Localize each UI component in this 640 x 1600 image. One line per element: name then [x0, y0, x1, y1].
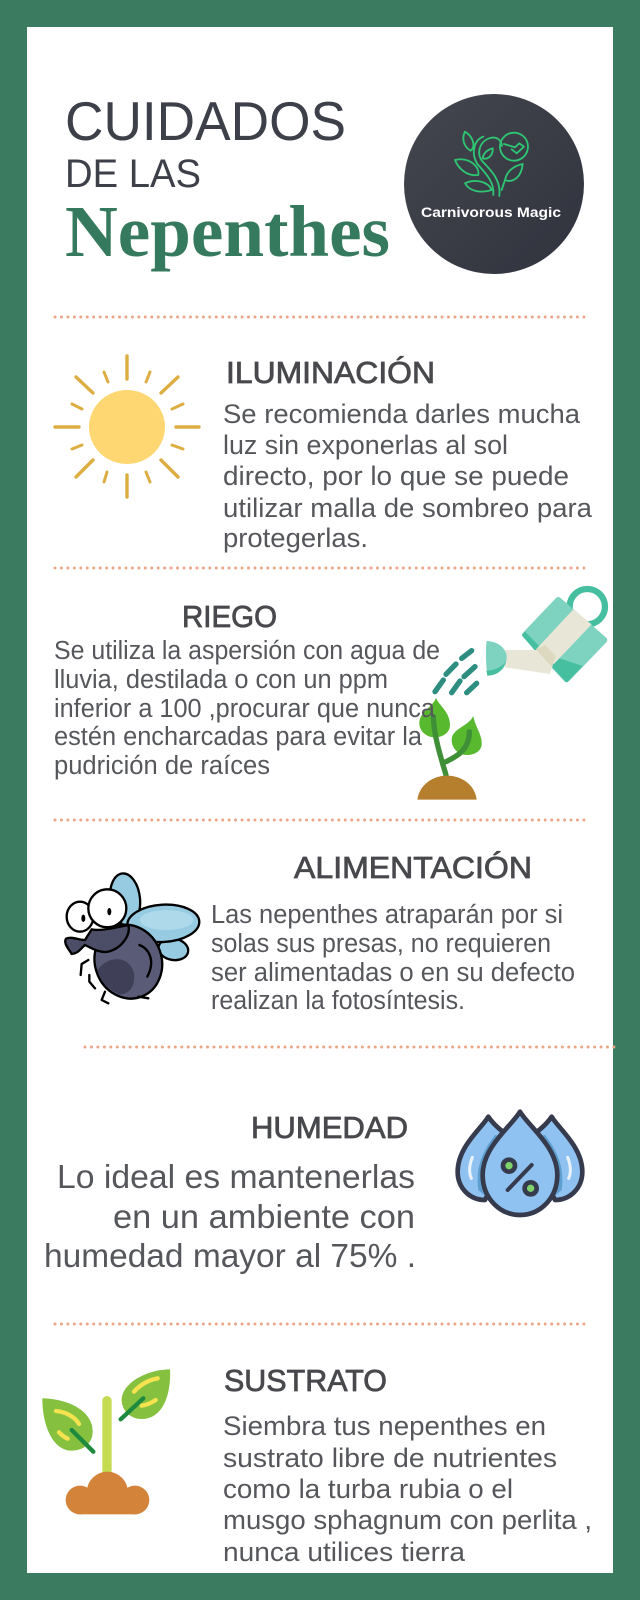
text: iluminación: luz sin exponerlas al sol — [223, 430, 508, 460]
text: alimentación: realizan la fotosíntesis. — [211, 987, 465, 1015]
title: DE LAS — [65, 152, 201, 196]
heading: sustrato: SUSTRATO — [224, 1363, 387, 1398]
heading: alimentación: ALIMENTACIÓN — [294, 850, 532, 885]
panel: alimentación — [65, 850, 575, 1015]
text: riego: pudrición de raíces — [54, 752, 270, 780]
text: alimentación: solas sus presas, no requieren — [211, 930, 551, 958]
text: humedad: humedad mayor al 75% . — [44, 1237, 416, 1274]
text: riego: Se utiliza la aspersión con agua de — [54, 637, 440, 665]
panel: riego — [54, 589, 605, 800]
text: sustrato — [223, 1411, 592, 1567]
panel: sustrato — [42, 1363, 592, 1567]
text: humedad — [44, 1158, 416, 1274]
text: sustrato: Siembra tus nepenthes en — [223, 1411, 546, 1441]
text: iluminación: protegerlas. — [223, 523, 368, 553]
title — [65, 90, 390, 272]
text: alimentación: Las nepenthes atraparán por si — [211, 901, 563, 929]
logo badge: Carnivorous Magic — [404, 94, 584, 274]
text: iluminación: utilizar malla de sombreo para — [223, 493, 592, 523]
text: riego: estén encharcadas para evitar la — [54, 723, 423, 751]
text: riego: inferior a 100 ,procurar que nunca — [54, 695, 436, 723]
text: humedad: Lo ideal es mantenerlas — [57, 1158, 415, 1195]
text: riego — [54, 637, 440, 780]
text: sustrato: como la turba rubia o el — [223, 1474, 513, 1504]
title: Nepenthes — [65, 191, 390, 272]
icon: watering can and plant — [417, 589, 605, 800]
logo badge: Carnivorous Magic: Carnivorous Magic — [421, 204, 561, 220]
text: iluminación — [223, 399, 592, 553]
text: riego: lluvia, destilada o con un ppm — [54, 666, 388, 694]
heading: iluminación: ILUMINACIÓN — [226, 355, 435, 390]
panel: humedad — [44, 1110, 582, 1274]
text: iluminación: directo, por lo que se puede — [223, 461, 569, 491]
icon: seedling — [42, 1369, 170, 1514]
text: alimentación — [211, 901, 575, 1015]
text: alimentación: ser alimentadas o en su defecto — [211, 959, 575, 987]
icon: sun — [55, 356, 199, 497]
text: iluminación: Se recomienda darles mucha — [223, 399, 580, 429]
title: CUIDADOS — [65, 90, 346, 152]
icon: water drops with percent — [458, 1112, 582, 1215]
text: humedad: en un ambiente con — [113, 1198, 415, 1235]
text: sustrato: musgo sphagnum con perlita , — [223, 1505, 592, 1535]
icon: fly — [65, 872, 200, 1008]
text: sustrato: sustrato libre de nutrientes — [223, 1443, 557, 1473]
panel: iluminación — [55, 355, 592, 553]
heading: riego: RIEGO — [182, 599, 277, 634]
heading: humedad: HUMEDAD — [251, 1110, 408, 1145]
text: sustrato: nunca utilices tierra — [223, 1537, 465, 1567]
